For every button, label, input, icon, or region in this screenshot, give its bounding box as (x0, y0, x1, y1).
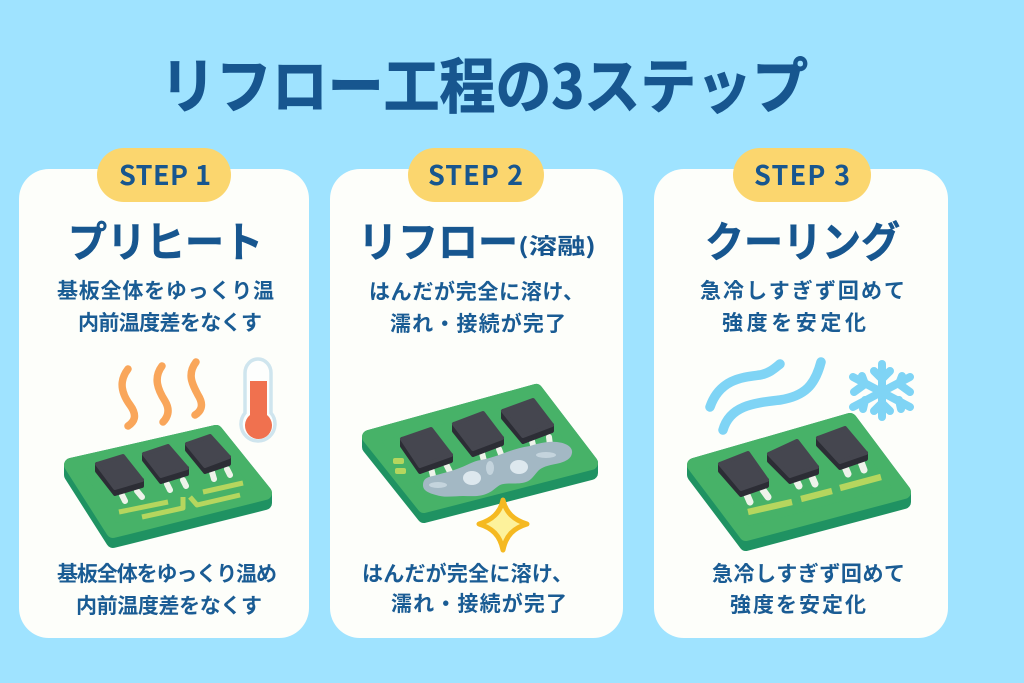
heading: cooling: クーリング (705, 209, 900, 270)
text: description top (369, 276, 584, 338)
badge: step 3: STEP 3 (754, 154, 850, 193)
text: description top: 基板全体をゆっくり温 (57, 275, 274, 305)
badge: step 2 (408, 148, 544, 202)
text: description top: はんだが完全に溶け、 (369, 276, 584, 306)
text: description top: 濡れ・接続が完了 (390, 308, 566, 338)
illustration: circuit board with solder (369, 391, 591, 516)
illustration: circuit board (71, 432, 265, 541)
text: description bottom: 濡れ・接続が完了 (391, 588, 567, 618)
text: description bottom: 急冷しすぎず回めて (712, 558, 905, 588)
text: description top: 急冷しすぎず回めて (700, 275, 905, 305)
panel: step 2 reflow (330, 148, 623, 638)
heading: reflow: (溶融) (518, 229, 596, 261)
text: description bottom: 基板全体をゆっくり温め (57, 558, 277, 588)
panel: step 1 preheat (19, 148, 309, 638)
text: description bottom (57, 558, 277, 620)
panel: step 3 cooling (654, 148, 948, 638)
text: description bottom (362, 558, 573, 618)
title: リフロー工程の3ステップ (160, 39, 808, 126)
heading: reflow: リフロー (358, 209, 518, 270)
text: description bottom: 内前温度差をなくす (76, 590, 262, 620)
text: description bottom: 強度を安定化 (730, 589, 866, 619)
text: description top (57, 275, 274, 337)
badge: step 1 (97, 148, 231, 202)
text: description top: 内前温度差をなくす (78, 307, 262, 337)
icon: snowflake (853, 364, 910, 417)
text: description bottom: はんだが完全に溶け、 (362, 558, 573, 588)
badge: step 1: STEP 1 (119, 154, 211, 193)
illustration: circuit board (694, 420, 904, 544)
solder blob (423, 442, 572, 497)
text: description top (700, 275, 905, 337)
heading: preheat: プリヒート (68, 209, 263, 270)
badge: step 2: STEP 2 (428, 154, 523, 193)
icon: thermometer (241, 359, 275, 441)
badge: step 3 (733, 148, 871, 202)
icon: cool air waves (710, 362, 821, 430)
icon: heat waves (122, 362, 201, 426)
icon: sparkle (479, 500, 527, 550)
text: description bottom (712, 558, 905, 619)
text: description top: 強度を安定化 (722, 307, 866, 337)
